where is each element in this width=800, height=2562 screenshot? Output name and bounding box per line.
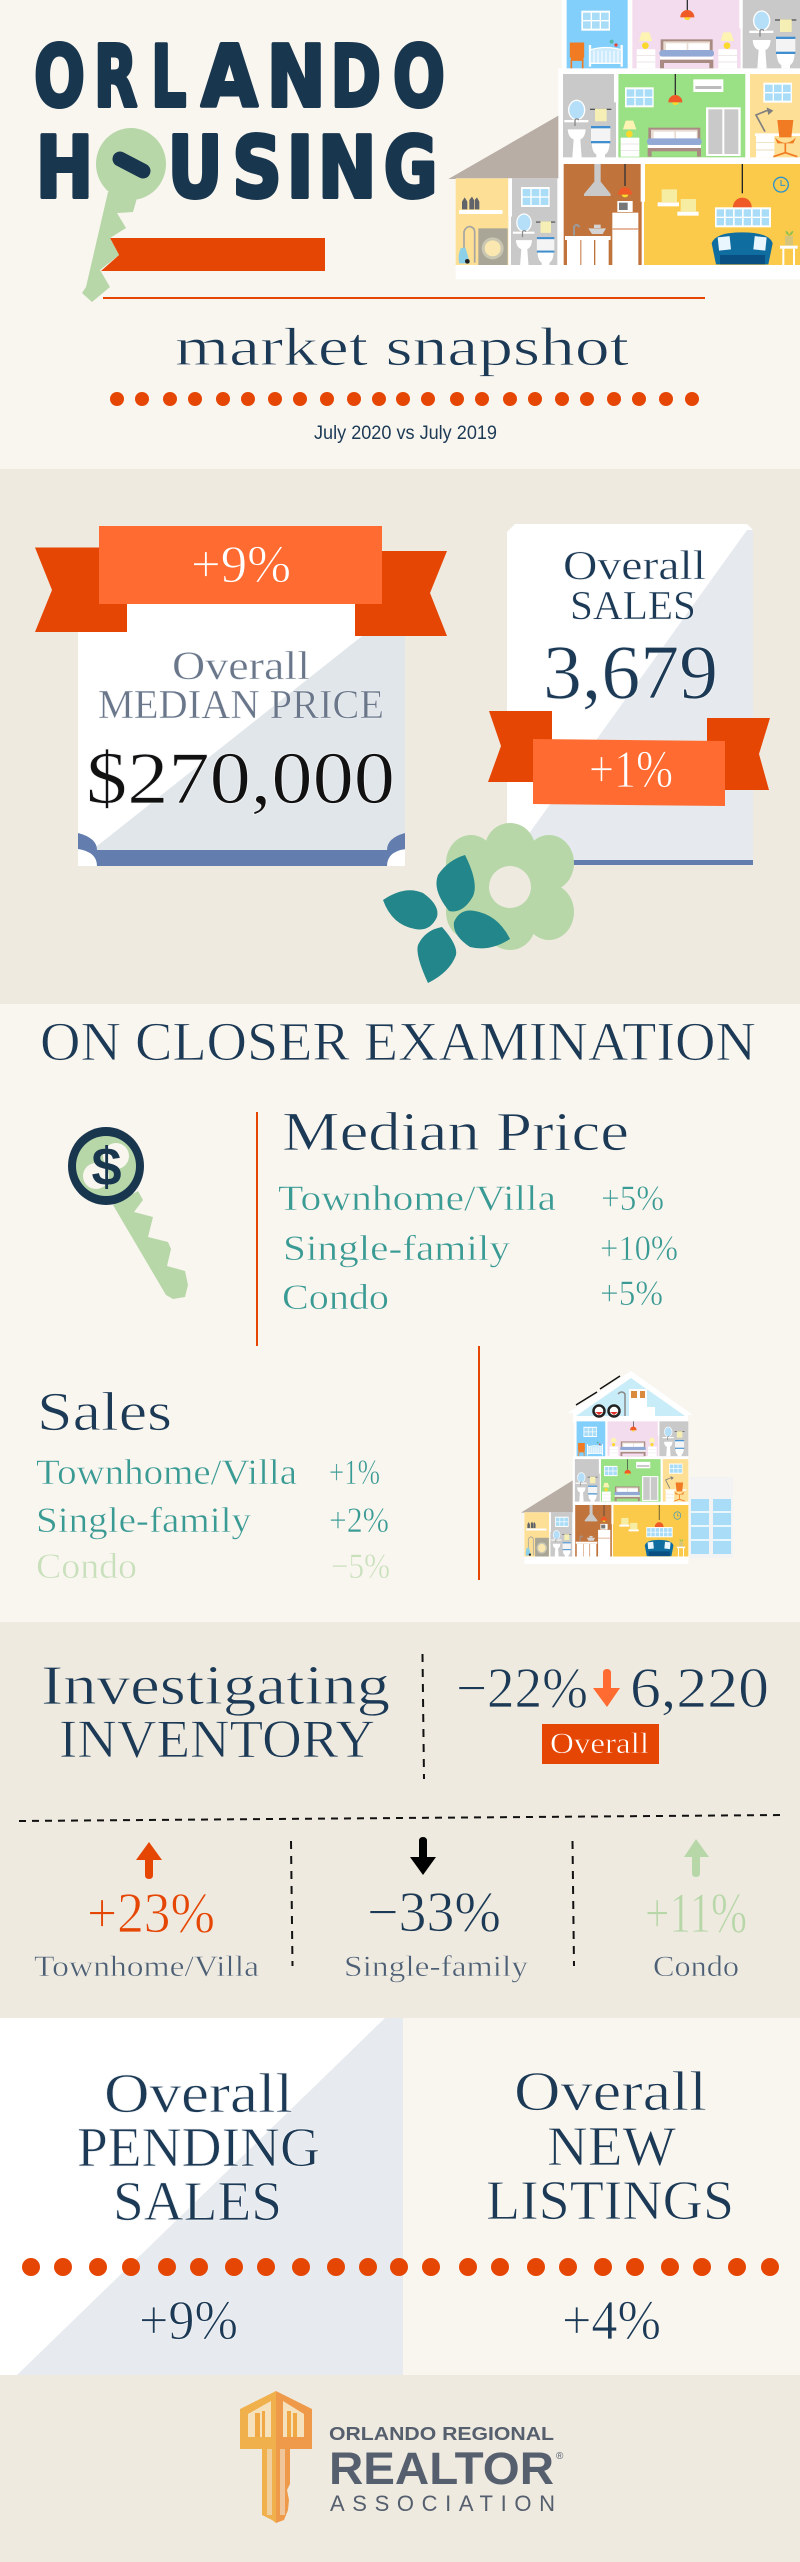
icon: up arrow	[136, 1842, 162, 1879]
dashed divider	[572, 1841, 574, 1966]
panel: overall sales	[488, 524, 770, 865]
row: condo	[36, 1546, 390, 1586]
panel: overall new listings: +4%	[562, 2290, 661, 2352]
title: Orlando Housing: H	[36, 119, 93, 218]
title: Orlando Housing: U	[168, 119, 223, 218]
divider line	[103, 297, 705, 299]
heading: median price: Median Price	[282, 1101, 629, 1162]
row: condo: Condo	[36, 1546, 137, 1586]
block: median price by type	[278, 1101, 678, 1317]
section background: footer	[0, 2375, 800, 2562]
logo: orlando regional realtor association	[240, 2391, 564, 2523]
stat: condo inventory: Condo	[653, 1950, 739, 1983]
wordmark: ®	[556, 2451, 564, 2462]
icon: up arrow	[684, 1839, 709, 1877]
icon: down arrow	[593, 1669, 620, 1707]
title: Orlando Housing: I	[286, 119, 314, 218]
title: Orlando Housing: L	[151, 28, 186, 127]
row: single-family: +2%	[329, 1500, 389, 1540]
row: condo: +5%	[600, 1273, 663, 1313]
label: median price: MEDIAN PRICE	[98, 681, 384, 727]
row: single-family	[283, 1228, 678, 1268]
title: Orlando Housing: O	[34, 28, 85, 127]
panel: overall pending sales	[0, 2018, 403, 2375]
label: overall: Overall	[563, 542, 706, 588]
ribbon: right tail	[707, 718, 770, 790]
banner ribbon	[101, 238, 325, 271]
panel: overall pending sales: PENDING	[77, 2117, 320, 2179]
row: townhome/villa: +5%	[601, 1178, 664, 1218]
title: Orlando Housing: O	[393, 28, 445, 127]
wordmark: ASSOCIATION	[330, 2491, 555, 2516]
row: single-family: Single-family	[283, 1228, 510, 1268]
title: Orlando Housing: D	[330, 28, 381, 127]
stat: single-family inventory	[344, 1837, 528, 1983]
title: Orlando Housing: O	[108, 116, 154, 215]
date range: July 2020 vs July 2019	[314, 423, 497, 444]
panel: overall pending sales: +9%	[139, 2290, 238, 2352]
section background: header	[0, 0, 800, 469]
value: 3,679: 3,679	[543, 629, 718, 715]
value: 6,220: 6,220	[630, 1657, 769, 1720]
row: condo: Condo	[282, 1277, 389, 1317]
icon: down arrow	[410, 1837, 436, 1875]
icon: dollar key	[68, 1127, 188, 1299]
icon: key replacing the letter O	[82, 128, 166, 302]
row: condo: −5%	[331, 1546, 390, 1586]
row: single-family	[36, 1500, 389, 1540]
panel: overall pending sales: Overall	[104, 2063, 293, 2125]
value: -22%: −22%	[456, 1657, 588, 1720]
change: +9%: +9%	[191, 536, 291, 594]
dotted divider	[22, 2258, 779, 2276]
panel: overall new listings: LISTINGS	[486, 2170, 734, 2232]
subtitle: market snapshot	[175, 317, 629, 377]
section background: inventory	[0, 1622, 800, 2018]
ribbon: left tail	[35, 548, 127, 632]
dashed divider	[291, 1841, 292, 1966]
row: townhome/villa: +1%	[329, 1452, 380, 1492]
ribbon: right tail	[355, 551, 447, 636]
ribbon: left tail	[488, 711, 552, 782]
divider line	[256, 1112, 258, 1346]
divider line	[478, 1346, 480, 1580]
row: single-family: +10%	[600, 1228, 678, 1268]
change: +1%: +1%	[589, 741, 673, 799]
panel: overall new listings: Overall	[514, 2061, 707, 2123]
label: sales: SALES	[570, 582, 696, 628]
section background: headline stats	[0, 469, 800, 1004]
stat: townhome/villa inventory: Townhome/Villa	[34, 1950, 259, 1983]
panel: overall new listings	[403, 2018, 800, 2375]
badge: overall: Overall	[550, 1727, 649, 1760]
dashed divider	[422, 1654, 424, 1779]
dotted divider	[110, 392, 699, 406]
wordmark: REALTOR	[329, 2443, 554, 2494]
title: Orlando Housing: A	[201, 28, 258, 127]
icon: dollar key: $	[91, 1137, 122, 1197]
row: single-family: Single-family	[36, 1500, 251, 1540]
stat: condo inventory: +11%	[645, 1882, 747, 1945]
ribbon: front	[99, 526, 382, 604]
illustration: house cross-section	[448, 0, 800, 279]
heading: investigating: Investigating	[41, 1655, 390, 1717]
title: Orlando Housing: R	[94, 28, 137, 127]
stat: condo inventory	[645, 1839, 747, 1983]
panel: overall pending sales: SALES	[113, 2171, 282, 2233]
title: Orlando Housing: N	[318, 119, 376, 218]
label: overall: Overall	[172, 643, 310, 688]
panel: overall new listings: NEW	[547, 2116, 676, 2178]
row: townhome/villa: Townhome/Villa	[278, 1178, 556, 1218]
wordmark	[329, 2424, 564, 2516]
title: Orlando Housing: S	[232, 119, 282, 218]
ribbon: front	[533, 739, 725, 806]
panel: overall median price	[35, 526, 447, 866]
row: townhome/villa: Townhome/Villa	[36, 1452, 297, 1492]
title: Orlando Housing: G	[384, 119, 438, 218]
badge: overall	[542, 1724, 659, 1764]
icon: flower with leaves	[383, 823, 574, 983]
heading: sales: Sales	[37, 1381, 172, 1442]
section background: closer examination	[0, 1004, 800, 1622]
wordmark: ORLANDO REGIONAL	[329, 2424, 554, 2444]
block: investigating inventory	[41, 1654, 769, 1779]
dashed divider	[19, 1815, 783, 1821]
stat: townhome/villa inventory: +23%	[87, 1882, 215, 1945]
row: townhome/villa	[278, 1178, 664, 1218]
value: $270,000: $270,000	[86, 738, 395, 820]
stat: single-family inventory: Single-family	[344, 1950, 528, 1983]
block: sales by type	[36, 1381, 390, 1586]
heading: on closer examination: ON CLOSER EXAMINATION	[40, 1011, 756, 1072]
title: Orlando Housing	[34, 28, 445, 218]
title: Orlando Housing: N	[267, 28, 326, 127]
illustration: small house with attic and windows	[521, 1371, 733, 1564]
heading: inventory: INVENTORY	[59, 1709, 375, 1769]
stat: single-family inventory: −33%	[367, 1881, 501, 1944]
stat: townhome/villa inventory	[34, 1842, 259, 1983]
icon: house key	[240, 2391, 312, 2523]
row: condo	[282, 1273, 663, 1317]
